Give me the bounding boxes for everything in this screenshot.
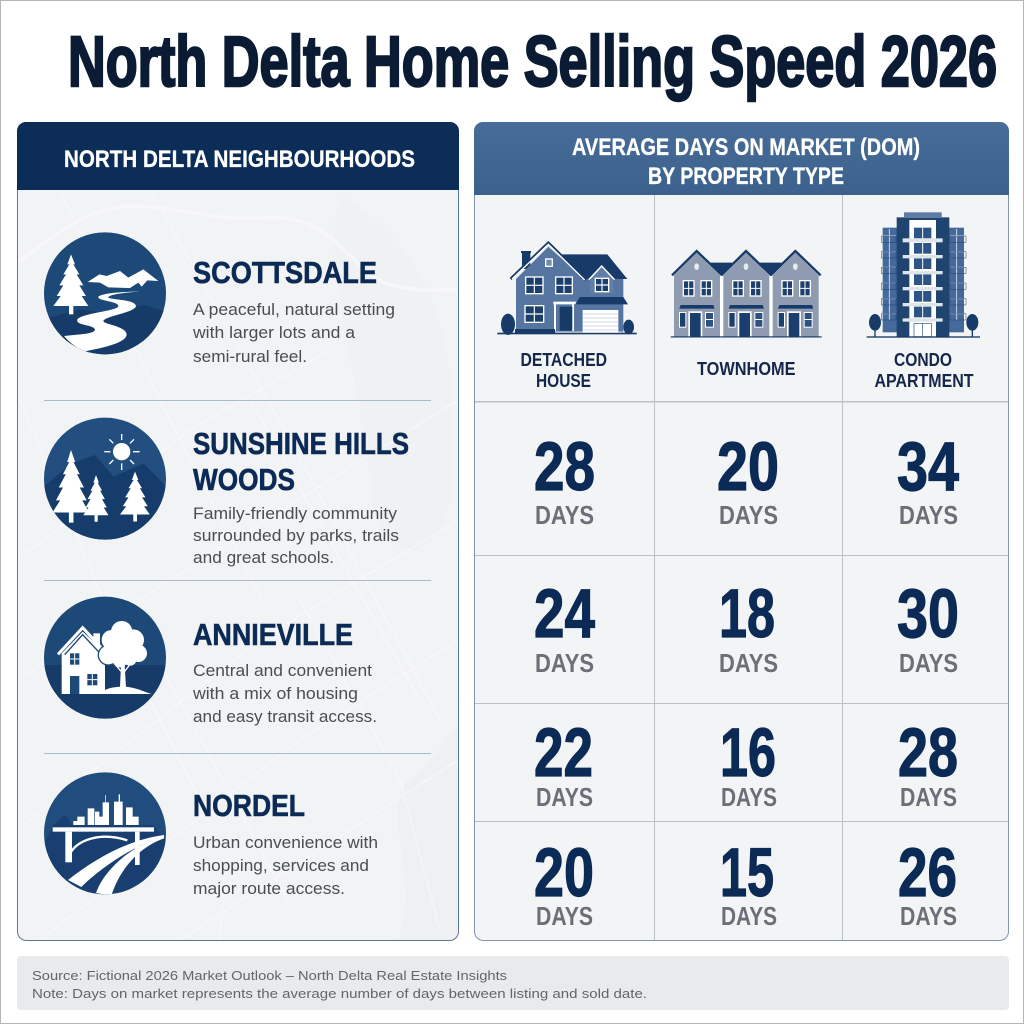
name: SUNSHINE HILLS (193, 427, 409, 461)
column label: HOUSE (536, 370, 591, 391)
description: A peaceful, natural setting (193, 301, 395, 319)
row 3 values: DAYS (536, 784, 593, 812)
row 4 values: 26 (898, 834, 957, 911)
neighbourhood: Scottsdale (43, 232, 395, 366)
icon: condo tower (867, 212, 980, 338)
column label: DETACHED (520, 349, 607, 370)
footer source note (17, 956, 1009, 1010)
description: Central and convenient (193, 662, 372, 680)
row 2 values: 18 (719, 575, 775, 652)
description: Family-friendly community (193, 505, 398, 523)
name (193, 427, 409, 497)
description: and great schools. (193, 549, 334, 567)
neighbourhood: Sunshine Hills Woods (40, 418, 409, 567)
row 1 values: DAYS (535, 502, 594, 530)
row 4 values: 15 (720, 834, 774, 911)
description (193, 505, 399, 567)
row 2 values: DAYS (719, 650, 778, 678)
row 2 values: 24 (534, 575, 595, 652)
panel heading: NORTH DELTA NEIGHBOURHOODS (64, 146, 415, 173)
description (192, 662, 377, 726)
row 3 values: 16 (720, 714, 776, 791)
row 3 values (534, 714, 958, 812)
column: condo apartment (867, 212, 980, 391)
row 1 values: 20 (717, 428, 779, 505)
column label: CONDO (894, 349, 952, 370)
panel header (17, 122, 459, 190)
footer source note: Source: Fictional 2026 Market Outlook – North Delta Real Estate Insights (32, 968, 508, 983)
name: SCOTTSDALE (193, 256, 377, 290)
description (192, 301, 395, 366)
column: townhome (671, 251, 822, 379)
row 2 values (534, 575, 959, 678)
neighbourhood: Annieville (43, 597, 377, 726)
table heading: AVERAGE DAYS ON MARKET (DOM) (572, 134, 920, 161)
row 4 values: DAYS (536, 903, 593, 931)
table heading: BY PROPERTY TYPE (648, 163, 844, 190)
panel body (18, 122, 458, 940)
column: detached house (497, 243, 637, 391)
icon: townhomes (671, 251, 822, 337)
name: NORDEL (193, 789, 305, 823)
row 1 values: DAYS (899, 502, 958, 530)
description: major route access. (193, 880, 345, 898)
row 1 values: DAYS (719, 502, 778, 530)
description: surrounded by parks, trails (193, 527, 399, 545)
row 2 values: DAYS (535, 650, 594, 678)
description (193, 834, 378, 898)
row 2 values: 30 (897, 575, 959, 652)
column label: TOWNHOME (697, 358, 796, 379)
row 1 values (534, 428, 959, 530)
icon: tree, mountains and river (43, 232, 173, 359)
column label (874, 349, 974, 391)
row 3 values: DAYS (900, 784, 957, 812)
row 1 values: 28 (534, 428, 595, 505)
neighbourhood: Nordel (43, 772, 378, 898)
panel: days on market table (474, 122, 1009, 940)
row 4 values: DAYS (721, 903, 777, 931)
row 3 values: 28 (898, 714, 958, 791)
table heading (572, 134, 920, 190)
description: shopping, services and (193, 857, 369, 875)
description: with a mix of housing (192, 685, 358, 703)
icon: house and tree (43, 597, 168, 723)
icon: detached house (497, 243, 637, 335)
table header (474, 122, 1009, 195)
row 4 values: 20 (534, 834, 594, 911)
table body (474, 122, 1008, 940)
map background (450, 932, 458, 940)
row 3 values: 22 (534, 714, 593, 791)
row 2 values: DAYS (899, 650, 958, 678)
icon: trees and sun (40, 418, 170, 543)
row 1 values: 34 (897, 428, 959, 505)
icon: skyline, bridge and highway (43, 772, 167, 898)
row 4 values (534, 834, 957, 931)
row 3 values: DAYS (721, 784, 777, 812)
name: ANNIEVILLE (193, 618, 353, 652)
description: and easy transit access. (193, 708, 377, 726)
row 4 values: DAYS (900, 903, 957, 931)
panel: neighbourhoods (17, 122, 470, 945)
footer source note: Note: Days on market represents the average number of days between listing and sold date. (32, 986, 647, 1001)
description: Urban convenience with (193, 834, 378, 852)
description: with larger lots and a (192, 324, 356, 342)
description: semi-rural feel. (193, 348, 307, 366)
name: WOODS (193, 463, 295, 497)
column label (520, 349, 607, 391)
column label: APARTMENT (874, 370, 974, 391)
